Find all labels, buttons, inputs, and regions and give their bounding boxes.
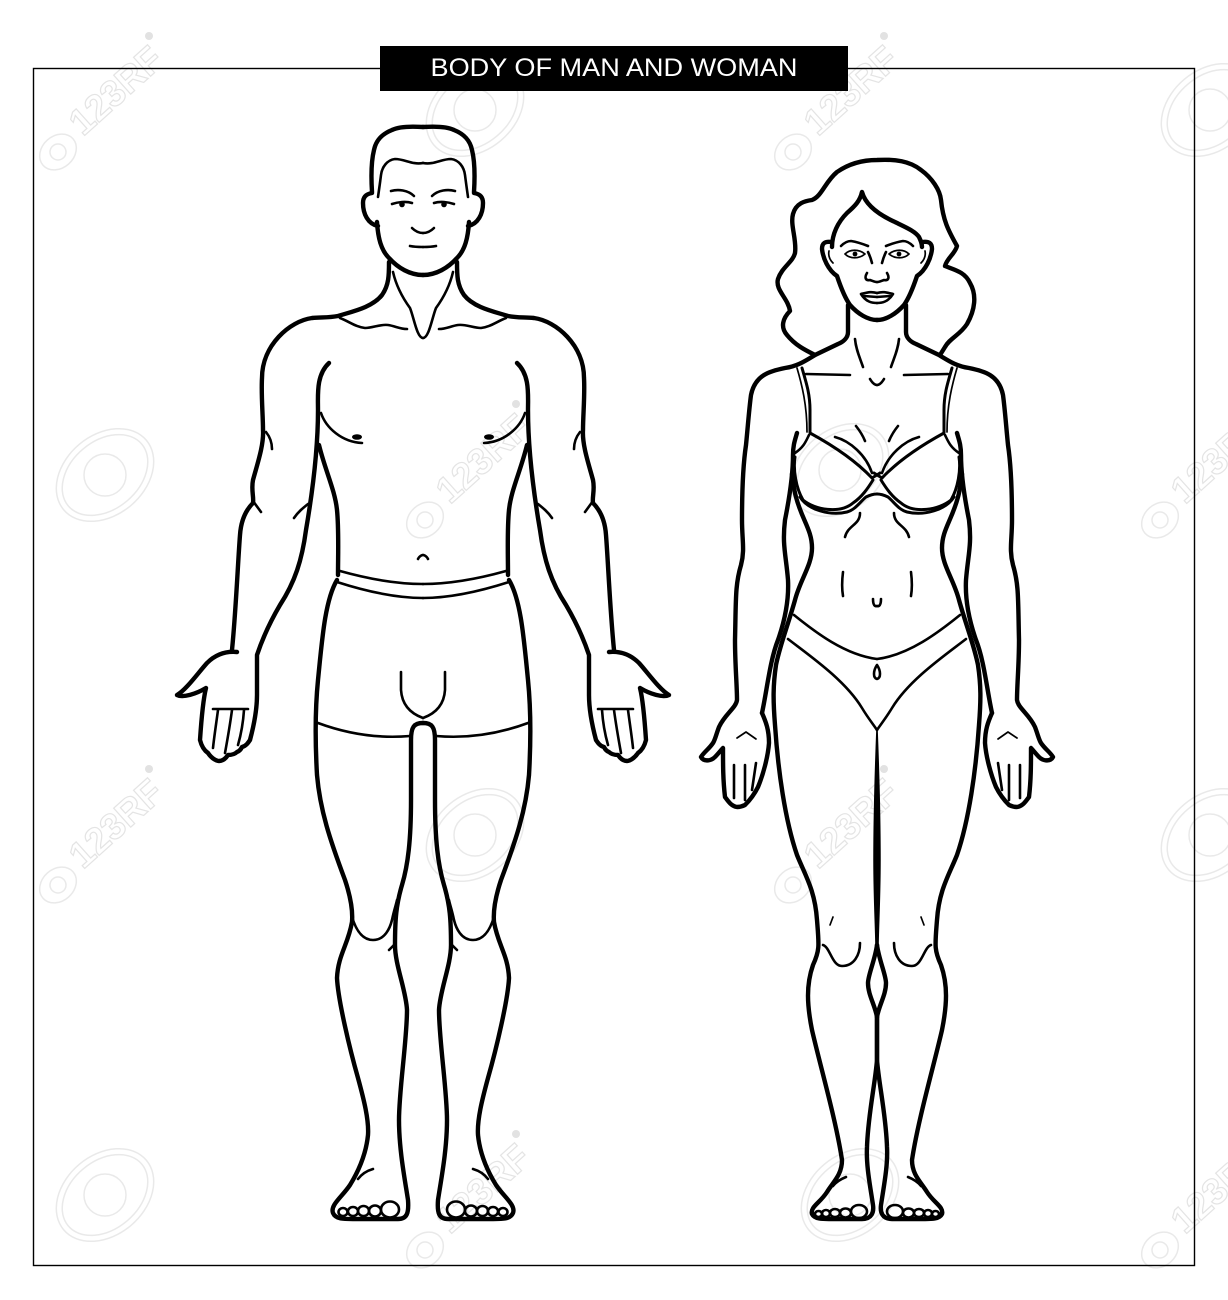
title banner: BODY OF MAN AND WOMAN bbox=[430, 54, 798, 82]
woman: underwear drop detail bbox=[874, 665, 880, 679]
woman: hairline and face outline bbox=[832, 192, 922, 247]
watermark pattern: 123RF bbox=[428, 1136, 538, 1241]
woman: right half of body bbox=[874, 241, 1053, 1219]
woman: hair bbox=[778, 160, 974, 355]
woman: left half of body bbox=[701, 241, 880, 1219]
title banner bbox=[380, 46, 848, 91]
watermark pattern: 123RF bbox=[428, 406, 538, 511]
figure: woman bbox=[701, 160, 1053, 1219]
man: right half of body bbox=[423, 127, 669, 1219]
watermark pattern: 123RF bbox=[796, 771, 906, 876]
woman: line between thighs bbox=[874, 728, 880, 950]
watermark pattern: 123RF bbox=[61, 38, 171, 143]
figure: man bbox=[177, 127, 669, 1219]
watermark pattern: 123RF bbox=[796, 38, 906, 143]
man: left half of body bbox=[177, 127, 423, 1219]
watermark pattern: 123RF bbox=[61, 771, 171, 876]
